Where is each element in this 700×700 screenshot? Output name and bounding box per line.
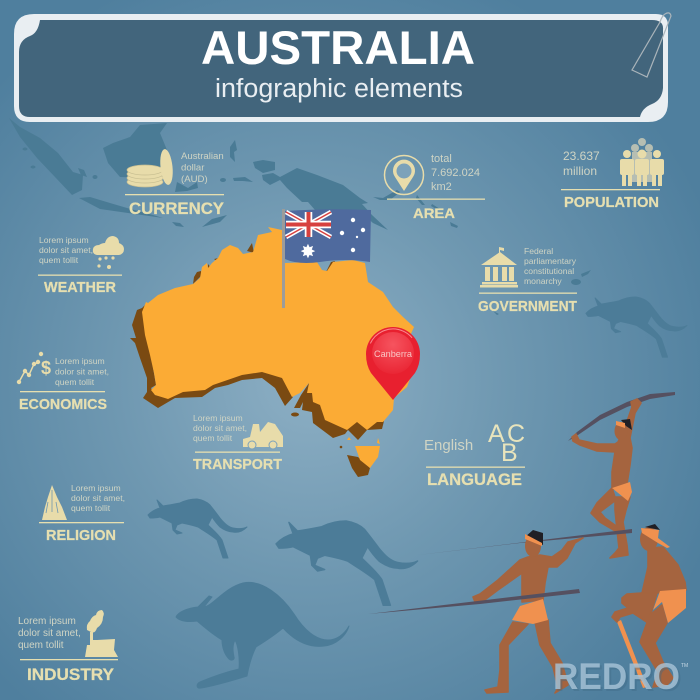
population text: million	[563, 164, 597, 178]
spear lower	[368, 589, 580, 614]
panel: population	[561, 138, 664, 211]
watermark: REDRO	[555, 658, 682, 699]
figure: man with spears	[368, 529, 632, 693]
watermark: TM	[681, 663, 688, 669]
icon: letters: B	[501, 439, 518, 467]
banner title: AUSTRALIA	[201, 21, 475, 74]
icon: cloud and rain	[93, 236, 124, 269]
man shorts	[512, 599, 548, 624]
banner subtitle: infographic elements	[215, 75, 463, 103]
currency text: Australian	[181, 151, 224, 162]
map Tasmania	[347, 455, 370, 477]
man legs	[591, 488, 619, 532]
icon: factory	[85, 610, 118, 657]
man torso	[642, 547, 686, 593]
population label: POPULATION	[564, 194, 659, 211]
spear upper	[418, 529, 632, 555]
map mainland	[142, 227, 415, 430]
flag of Australia	[285, 209, 371, 263]
man head	[614, 422, 628, 440]
religion text: Lorem ipsum	[71, 483, 121, 493]
panel: language	[424, 420, 525, 489]
icon: letters	[488, 420, 525, 467]
icon: praying hands	[42, 485, 67, 520]
government label: GOVERNMENT	[478, 298, 577, 315]
flag stars: ✸	[300, 242, 316, 263]
economics text: quem tollit	[55, 377, 95, 387]
industry label: INDUSTRY	[27, 666, 114, 684]
transport text: Lorem ipsum	[193, 413, 243, 423]
currency text: (AUD)	[181, 174, 208, 185]
panel: area	[384, 153, 485, 221]
icon: dump truck	[243, 422, 283, 449]
man shorts	[653, 589, 686, 623]
panel: transport	[193, 413, 283, 473]
flag field	[285, 209, 371, 263]
man shorts	[612, 482, 632, 501]
area text: km2	[431, 181, 452, 193]
religion text: quem tollit	[71, 503, 111, 513]
islands map silhouette	[9, 118, 591, 315]
man body	[572, 399, 641, 490]
panel: currency	[125, 148, 224, 218]
industry text: Lorem ipsum	[18, 616, 76, 627]
panel: weather	[38, 235, 124, 296]
map of Australia	[130, 227, 415, 477]
icon: people group	[620, 138, 664, 186]
panel: government	[478, 246, 577, 315]
language label: LANGUAGE	[427, 471, 522, 489]
map coast shadow	[130, 243, 384, 448]
watermark: REDRO	[553, 656, 680, 697]
government text: parliamentary	[524, 256, 577, 266]
weather text: quem tollit	[39, 255, 79, 265]
figure: man with stick	[568, 392, 675, 558]
transport text: quem tollit	[193, 433, 233, 443]
industry text: quem tollit	[18, 640, 64, 651]
man torso and arms	[473, 538, 583, 602]
banner frame	[14, 14, 668, 122]
pole of flag	[282, 209, 285, 308]
weather text: dolor sit amet,	[39, 245, 93, 255]
area label: AREA	[413, 205, 455, 221]
panel: religion	[39, 483, 125, 544]
government text: monarchy	[524, 276, 562, 286]
man standing leg	[640, 605, 673, 687]
union jack	[286, 212, 331, 237]
header banner	[14, 13, 671, 122]
currency label: CURRENCY	[129, 200, 224, 218]
language text: English	[424, 437, 473, 454]
kangaroo left	[148, 499, 247, 558]
icon: letters: A	[488, 420, 505, 448]
pin: Canberra: Canberra	[374, 349, 413, 360]
economics text: Lorem ipsum	[55, 356, 105, 366]
banner panel	[19, 20, 663, 117]
economics text: dolor sit amet,	[55, 366, 109, 376]
population text: 23.637	[563, 149, 600, 163]
kangaroo right	[586, 297, 687, 357]
area text: total	[431, 153, 452, 165]
paperclip	[632, 13, 671, 77]
transport text: dolor sit amet,	[193, 423, 247, 433]
government text: constitutional	[524, 266, 574, 276]
man head	[525, 535, 541, 557]
stick	[568, 392, 675, 441]
icon: letters: C	[507, 420, 525, 448]
icon: parliament building	[480, 247, 518, 288]
area text: 7.692.024	[431, 167, 480, 179]
kangaroo large	[176, 582, 349, 688]
economics label: ECONOMICS	[19, 396, 107, 413]
transport label: TRANSPORT	[193, 456, 282, 473]
panel: industry	[18, 610, 118, 684]
weather text: Lorem ipsum	[39, 235, 89, 245]
digging stick	[617, 620, 647, 688]
currency text: dollar	[181, 162, 205, 174]
man raised leg	[612, 593, 657, 623]
icon: chart and dollar: $	[41, 358, 51, 378]
man head	[640, 527, 658, 551]
industry text: dolor sit amet,	[18, 628, 81, 639]
religion text: dolor sit amet,	[71, 493, 125, 503]
figure: crouching man	[612, 524, 686, 688]
weather label: WEATHER	[44, 279, 116, 296]
government text: Federal	[524, 246, 553, 256]
pin: Canberra	[360, 321, 426, 400]
icon: location circle	[384, 156, 424, 194]
kangaroo middle	[276, 521, 418, 605]
panel: economics	[17, 352, 109, 413]
man legs	[485, 622, 528, 693]
icon: coins	[127, 148, 174, 187]
religion label: RELIGION	[46, 527, 116, 544]
